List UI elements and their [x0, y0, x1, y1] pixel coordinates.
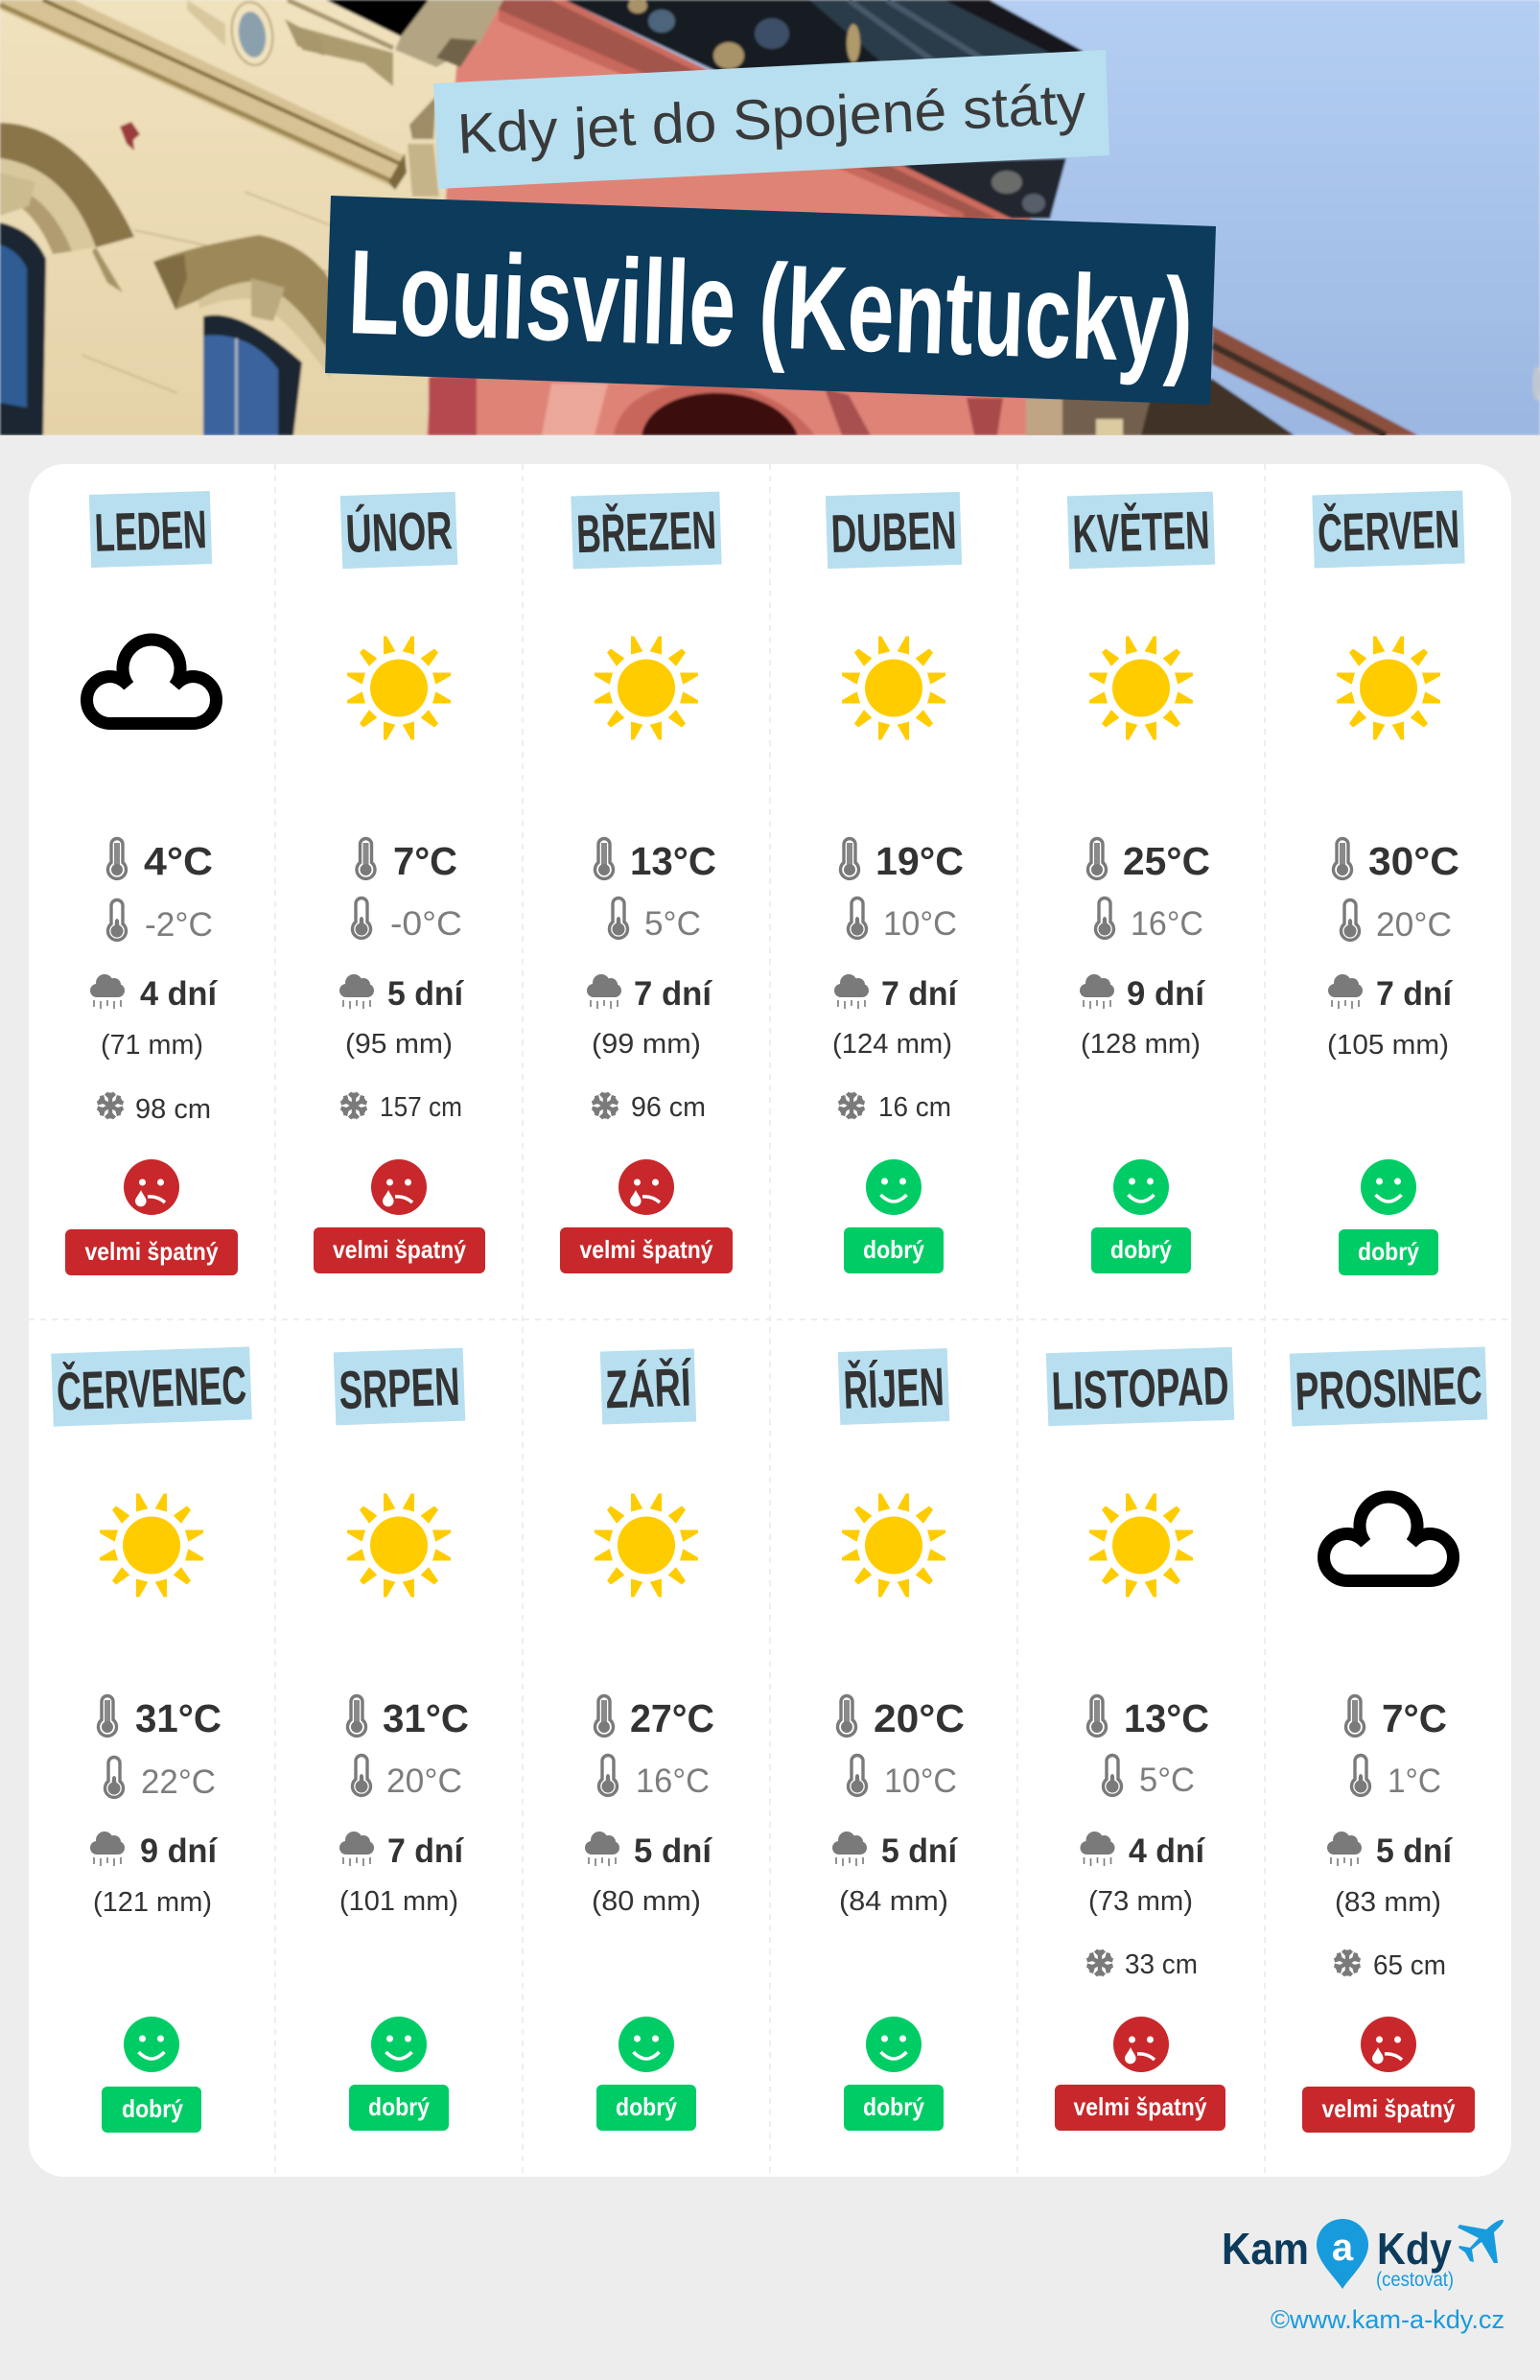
snowfall: [838, 1092, 951, 1123]
rain days: 7 dní: [881, 975, 958, 1013]
rating pill: [560, 1227, 733, 1273]
rating face: [1361, 1159, 1416, 1215]
high temperature: 25°C: [1123, 839, 1210, 883]
rating pill: velmi špatný: [333, 1235, 466, 1264]
month label: KVĚTEN: [1072, 500, 1211, 564]
month label: ČERVEN: [1317, 499, 1460, 563]
low temperature: [105, 1757, 216, 1801]
low temperature: [1095, 898, 1203, 943]
rain days: [90, 974, 218, 1013]
low temperature: [1352, 1755, 1441, 1800]
rainfall: (84 mm): [839, 1886, 948, 1917]
month label: [1067, 492, 1215, 569]
rating pill: dobrý: [863, 1235, 924, 1264]
logo wordmark right: Kdy: [1377, 2224, 1452, 2274]
low temperature: 1°C: [1388, 1762, 1441, 1800]
rain days: 5 dní: [1376, 1832, 1453, 1870]
month label: [838, 1348, 949, 1425]
snowfall: [1086, 1949, 1198, 1980]
panel: July: [51, 1346, 252, 2133]
rating pill: velmi špatný: [579, 1235, 713, 1264]
rainfall: (95 mm): [345, 1029, 453, 1060]
low temperature: [598, 1755, 710, 1800]
rainfall: (128 mm): [1081, 1029, 1201, 1060]
rainfall: (99 mm): [592, 1029, 701, 1060]
month label: BŘEZEN: [575, 500, 717, 564]
rating pill: [1055, 2085, 1225, 2131]
month label: [89, 491, 212, 568]
icon: map pin: [1317, 2219, 1368, 2289]
rating pill: dobrý: [1358, 1237, 1419, 1266]
icon: airplane: [1458, 2220, 1504, 2263]
month label: [1312, 491, 1465, 568]
rating pill: dobrý: [863, 2092, 924, 2121]
website credit: ©www.kam-a-kdy.cz: [1271, 2305, 1505, 2334]
rain days: [1080, 1832, 1205, 1870]
snowfall: [1334, 1950, 1446, 1981]
rainfall: (83 mm): [1335, 1887, 1441, 1918]
month label: ŘÍJEN: [842, 1356, 945, 1420]
subtitle banner: Kdy jet do Spojené státy: [455, 72, 1087, 166]
high temperature: 20°C: [874, 1696, 965, 1740]
high temperature: 13°C: [630, 839, 716, 883]
high temperature: 19°C: [875, 839, 964, 883]
rainfall: (105 mm): [1327, 1030, 1449, 1061]
icon: sun: [1337, 637, 1440, 740]
month label: [1290, 1346, 1487, 1427]
rain days: 7 dní: [1376, 975, 1453, 1013]
logo wordmark left: Kam: [1222, 2224, 1309, 2274]
high temperature: [357, 838, 457, 883]
month label: ZÁŘÍ: [605, 1357, 692, 1419]
rain days: 9 dní: [140, 1832, 218, 1870]
low temperature: 16°C: [636, 1762, 710, 1800]
high temperature: [1346, 1695, 1447, 1740]
rating pill: velmi špatný: [1321, 2094, 1456, 2123]
month label: [571, 492, 722, 569]
rating pill: [596, 2085, 696, 2131]
snowfall: [340, 1092, 462, 1123]
rainfall: (121 mm): [93, 1887, 212, 1918]
rain days: [339, 974, 464, 1013]
rating pill: [844, 2085, 944, 2131]
low temperature: [848, 1755, 957, 1800]
high temperature: [595, 838, 716, 883]
rain days: [1328, 974, 1453, 1013]
title banner: [325, 196, 1216, 405]
low temperature: [1103, 1755, 1195, 1799]
low temperature: [353, 1755, 462, 1800]
rain days: 4 dní: [1129, 1832, 1205, 1870]
icon: sun: [842, 637, 945, 740]
rating pill: [314, 1227, 485, 1273]
low temperature: [848, 898, 957, 943]
rating pill: dobrý: [616, 2092, 677, 2121]
title banner: Louisville (Kentucky): [346, 225, 1195, 388]
icon: sun: [842, 1494, 945, 1598]
rain days: [1327, 1832, 1453, 1870]
high temperature: 31°C: [383, 1696, 469, 1740]
rain days: 7 dní: [634, 975, 712, 1013]
rating pill: velmi špatný: [1074, 2092, 1207, 2121]
rain days: [339, 1832, 464, 1870]
rating face: [618, 2017, 674, 2072]
high temperature: [107, 838, 213, 883]
icon: cloud: [1323, 1497, 1454, 1580]
rating face: [124, 1159, 179, 1215]
low temperature: 20°C: [386, 1762, 462, 1800]
rating face: [1361, 2017, 1416, 2072]
rain days: [832, 1832, 958, 1870]
snowfall: [592, 1092, 706, 1123]
rating face: [371, 1159, 427, 1215]
low temperature: [107, 899, 213, 944]
panel: May: [1067, 492, 1215, 1273]
rating face: [866, 1159, 922, 1215]
panel: March: [560, 492, 733, 1273]
rain days: 5 dní: [634, 1832, 712, 1870]
rating pill: [1091, 1227, 1191, 1273]
panel: climate calendar card: [29, 464, 1511, 2177]
low temperature: 20°C: [1376, 906, 1452, 944]
high temperature: 4°C: [144, 839, 213, 883]
low temperature: 10°C: [884, 1762, 957, 1800]
icon: cloud: [86, 640, 217, 723]
rain days: 7 dní: [387, 1832, 464, 1870]
panel: February: [314, 492, 485, 1273]
snowfall: 96 cm: [631, 1092, 706, 1123]
snowfall: 33 cm: [1125, 1949, 1198, 1980]
low temperature: 16°C: [1131, 905, 1203, 943]
month label: SRPEN: [338, 1356, 461, 1420]
low temperature: [610, 898, 701, 943]
rating pill: dobrý: [1110, 1235, 1172, 1264]
snowfall: 65 cm: [1373, 1950, 1446, 1981]
rating face: [618, 1159, 674, 1215]
high temperature: [838, 1695, 965, 1740]
icon: sun: [1089, 1494, 1193, 1598]
month label: [334, 1348, 465, 1425]
month label: ÚNOR: [344, 500, 454, 564]
low temperature: [1341, 899, 1452, 944]
icon: sun: [595, 637, 698, 740]
panel: August: [334, 1348, 469, 2131]
low temperature: 22°C: [141, 1763, 216, 1801]
rain days: 9 dní: [1127, 975, 1205, 1013]
panel: April: [826, 492, 964, 1273]
icon: sun: [1089, 637, 1193, 740]
rating pill: velmi špatný: [84, 1237, 219, 1266]
month label: ČERVENEC: [56, 1355, 247, 1421]
panel: November: [1046, 1347, 1234, 2131]
header photo: historic building against sky: [0, 0, 1540, 436]
high temperature: 27°C: [630, 1696, 714, 1740]
rainfall: (101 mm): [339, 1886, 458, 1917]
rainfall: (124 mm): [832, 1029, 952, 1060]
rating pill: [844, 1227, 944, 1273]
low temperature: 10°C: [883, 905, 957, 943]
rating pill: dobrý: [122, 2094, 183, 2123]
high temperature: 13°C: [1124, 1696, 1209, 1740]
snowfall: 157 cm: [380, 1092, 462, 1123]
panel: January: [65, 491, 238, 1275]
high temperature: [1333, 838, 1459, 883]
rainfall: (73 mm): [1088, 1886, 1193, 1917]
low temperature: 5°C: [1139, 1762, 1195, 1799]
snowfall: 98 cm: [135, 1094, 211, 1125]
rainfall: (71 mm): [101, 1030, 203, 1061]
snowfall: [97, 1093, 211, 1125]
rain days: 5 dní: [881, 1832, 958, 1870]
panel: September: [585, 1348, 714, 2131]
low temperature: -2°C: [145, 906, 213, 944]
high temperature: 30°C: [1368, 839, 1459, 883]
month label: LISTOPAD: [1051, 1355, 1230, 1421]
rating face: [124, 2017, 179, 2072]
rain days: [1080, 974, 1205, 1013]
high temperature: [347, 1695, 469, 1740]
subtitle banner: [433, 50, 1109, 189]
low temperature: 5°C: [644, 905, 701, 943]
rating pill: [65, 1229, 238, 1275]
rating face: [866, 2017, 922, 2072]
panel: December: [1290, 1346, 1487, 2133]
rating face: [1113, 1159, 1169, 1215]
rain days: 4 dní: [140, 975, 218, 1013]
rain days: 5 dní: [387, 975, 464, 1013]
rainfall: (80 mm): [592, 1886, 701, 1917]
high temperature: [1087, 1695, 1209, 1740]
high temperature: [98, 1695, 222, 1740]
rain days: [587, 974, 712, 1013]
panel: October: [832, 1348, 965, 2131]
rain days: [90, 1832, 218, 1870]
rating pill: dobrý: [368, 2092, 430, 2121]
icon: sun: [100, 1494, 203, 1598]
high temperature: 7°C: [393, 839, 457, 883]
rating face: [1113, 2017, 1169, 2072]
icon: sun: [347, 1494, 451, 1598]
rating face: [371, 2017, 427, 2072]
high temperature: 7°C: [1382, 1696, 1447, 1740]
logo tagline: (cestovat): [1376, 2269, 1454, 2291]
panel: June: [1312, 491, 1465, 1275]
rating pill: [1302, 2087, 1475, 2133]
high temperature: [595, 1695, 714, 1740]
icon: sun: [595, 1494, 698, 1598]
rain days: [834, 974, 958, 1013]
month label: DUBEN: [830, 500, 958, 564]
rating pill: [1339, 1229, 1438, 1275]
icon: map pin: a: [1332, 2227, 1354, 2269]
icon: sun: [347, 637, 451, 740]
month label: [1046, 1347, 1234, 1426]
snowfall: 16 cm: [878, 1092, 951, 1123]
month label: [51, 1346, 252, 1427]
low temperature: [353, 898, 462, 943]
month label: [600, 1348, 696, 1425]
high temperature: 31°C: [135, 1696, 222, 1740]
rain days: [585, 1832, 712, 1870]
logo: Kam a Kdy: [1222, 2219, 1504, 2291]
month label: LEDEN: [94, 499, 208, 563]
month label: [340, 492, 457, 569]
rating pill: [102, 2087, 201, 2133]
low temperature: -0°C: [390, 905, 462, 943]
month label: [826, 492, 962, 569]
rating pill: [349, 2085, 449, 2131]
